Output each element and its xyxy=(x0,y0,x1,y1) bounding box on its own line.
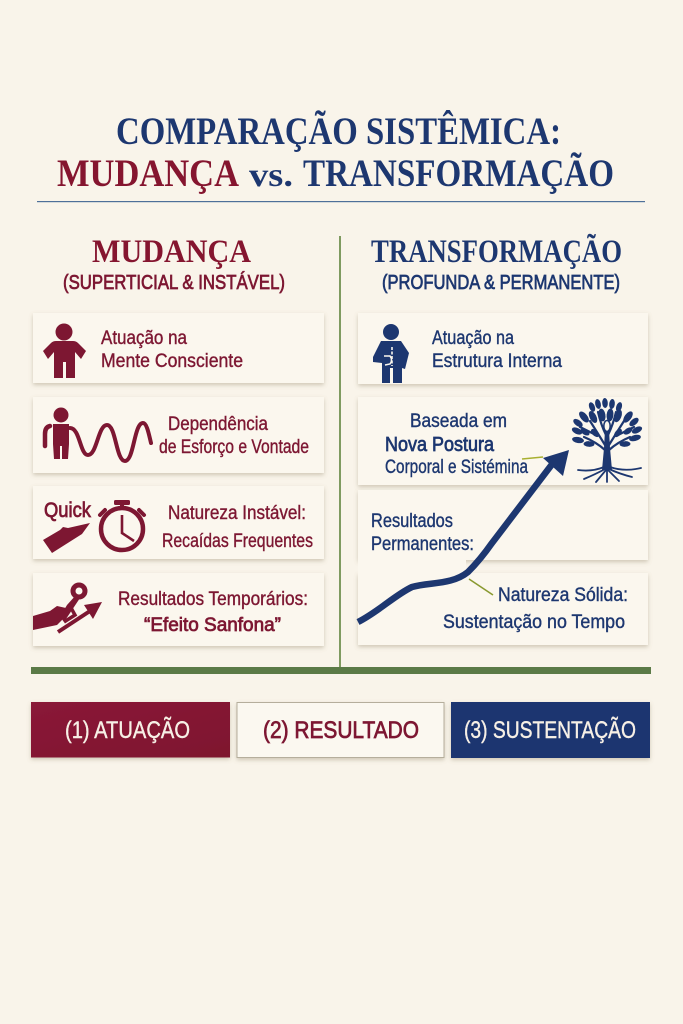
label text xyxy=(101,327,243,372)
callout line: bottom xyxy=(469,579,493,595)
label text xyxy=(371,510,474,555)
label text: Natureza Instável: xyxy=(168,502,306,524)
label text: Atuação na xyxy=(432,327,514,349)
label text: Sustentação no Tempo xyxy=(443,611,625,633)
title line 2: MUDANÇA xyxy=(57,152,239,195)
label text: Permanentes: xyxy=(371,533,474,555)
title line 1: COMPARAÇÃO SISTÊMICA: xyxy=(116,109,561,153)
label text: Corporal e Sistémina xyxy=(385,456,528,478)
label text: Recaídas Frequentes xyxy=(162,530,313,552)
arrow: rising path xyxy=(358,450,569,622)
label text: Resultados Temporários: xyxy=(118,588,308,610)
icon: person xyxy=(43,324,86,378)
label text xyxy=(162,502,313,552)
label text: de Esforço e Vontade xyxy=(159,436,309,458)
heading: mudança xyxy=(63,234,285,294)
title line 2: TRANSFORMAÇÃO xyxy=(303,151,614,195)
button: atuação xyxy=(31,702,230,758)
panel: nova postura xyxy=(358,397,648,485)
heading: transformação: TRANSFORMAÇÃO xyxy=(371,233,622,270)
label text: Atuação na xyxy=(101,327,187,349)
heading: transformação: (PROFUNDA & PERMANENTE) xyxy=(382,271,620,294)
heading: mudança: MUDANÇA xyxy=(92,234,251,270)
icon: person with wave xyxy=(45,408,151,461)
label text xyxy=(432,327,562,372)
icon: stopwatch xyxy=(100,500,144,550)
title line 2: vs. xyxy=(249,157,293,194)
panel: atuação na mente consciente xyxy=(33,313,324,383)
label text: Dependência xyxy=(168,413,268,435)
label text: “Efeito Sanfona” xyxy=(144,614,281,636)
button: sustentação xyxy=(451,702,650,758)
icon: quick shoe xyxy=(43,499,91,553)
button: resultado xyxy=(237,702,444,758)
label text: Resultados xyxy=(371,510,453,532)
label text xyxy=(443,584,628,633)
label text: Estrutura Interna xyxy=(432,350,562,372)
label text: Baseada em xyxy=(410,410,507,432)
label text: Natureza Sólida: xyxy=(498,584,628,606)
icon: person with spine xyxy=(373,324,409,383)
panel: natureza instável xyxy=(33,486,324,559)
label text: Mente Consciente xyxy=(101,350,243,372)
icon: quick shoe: Quick xyxy=(44,499,91,522)
label text xyxy=(385,410,528,478)
icon: hand with arrow xyxy=(33,585,102,632)
heading: mudança: (SUPERTICIAL & INSTÁVEL) xyxy=(63,271,285,294)
panel: atuação na estrutura interna xyxy=(358,313,648,384)
panel: dependência de esforço e vontade xyxy=(33,397,324,473)
button: sustentação: (3) SUSTENTAÇÃO xyxy=(464,717,636,744)
panel: resultados permanentes xyxy=(358,490,648,560)
panel: resultados temporários xyxy=(33,573,324,646)
icon: tree xyxy=(571,398,643,482)
button: resultado: (2) RESULTADO xyxy=(263,717,419,744)
merged left area between panels xyxy=(358,556,466,580)
callout line: top xyxy=(522,457,543,459)
panel: natureza sólida xyxy=(358,556,648,645)
heading: transformação xyxy=(371,233,622,294)
button: atuação: (1) ATUAÇÃO xyxy=(65,717,190,744)
center divider xyxy=(339,236,341,668)
label text xyxy=(159,413,309,458)
label text xyxy=(118,588,308,636)
green divider bar xyxy=(31,667,651,674)
label text: Nova Postura xyxy=(385,433,495,456)
title xyxy=(57,109,614,195)
